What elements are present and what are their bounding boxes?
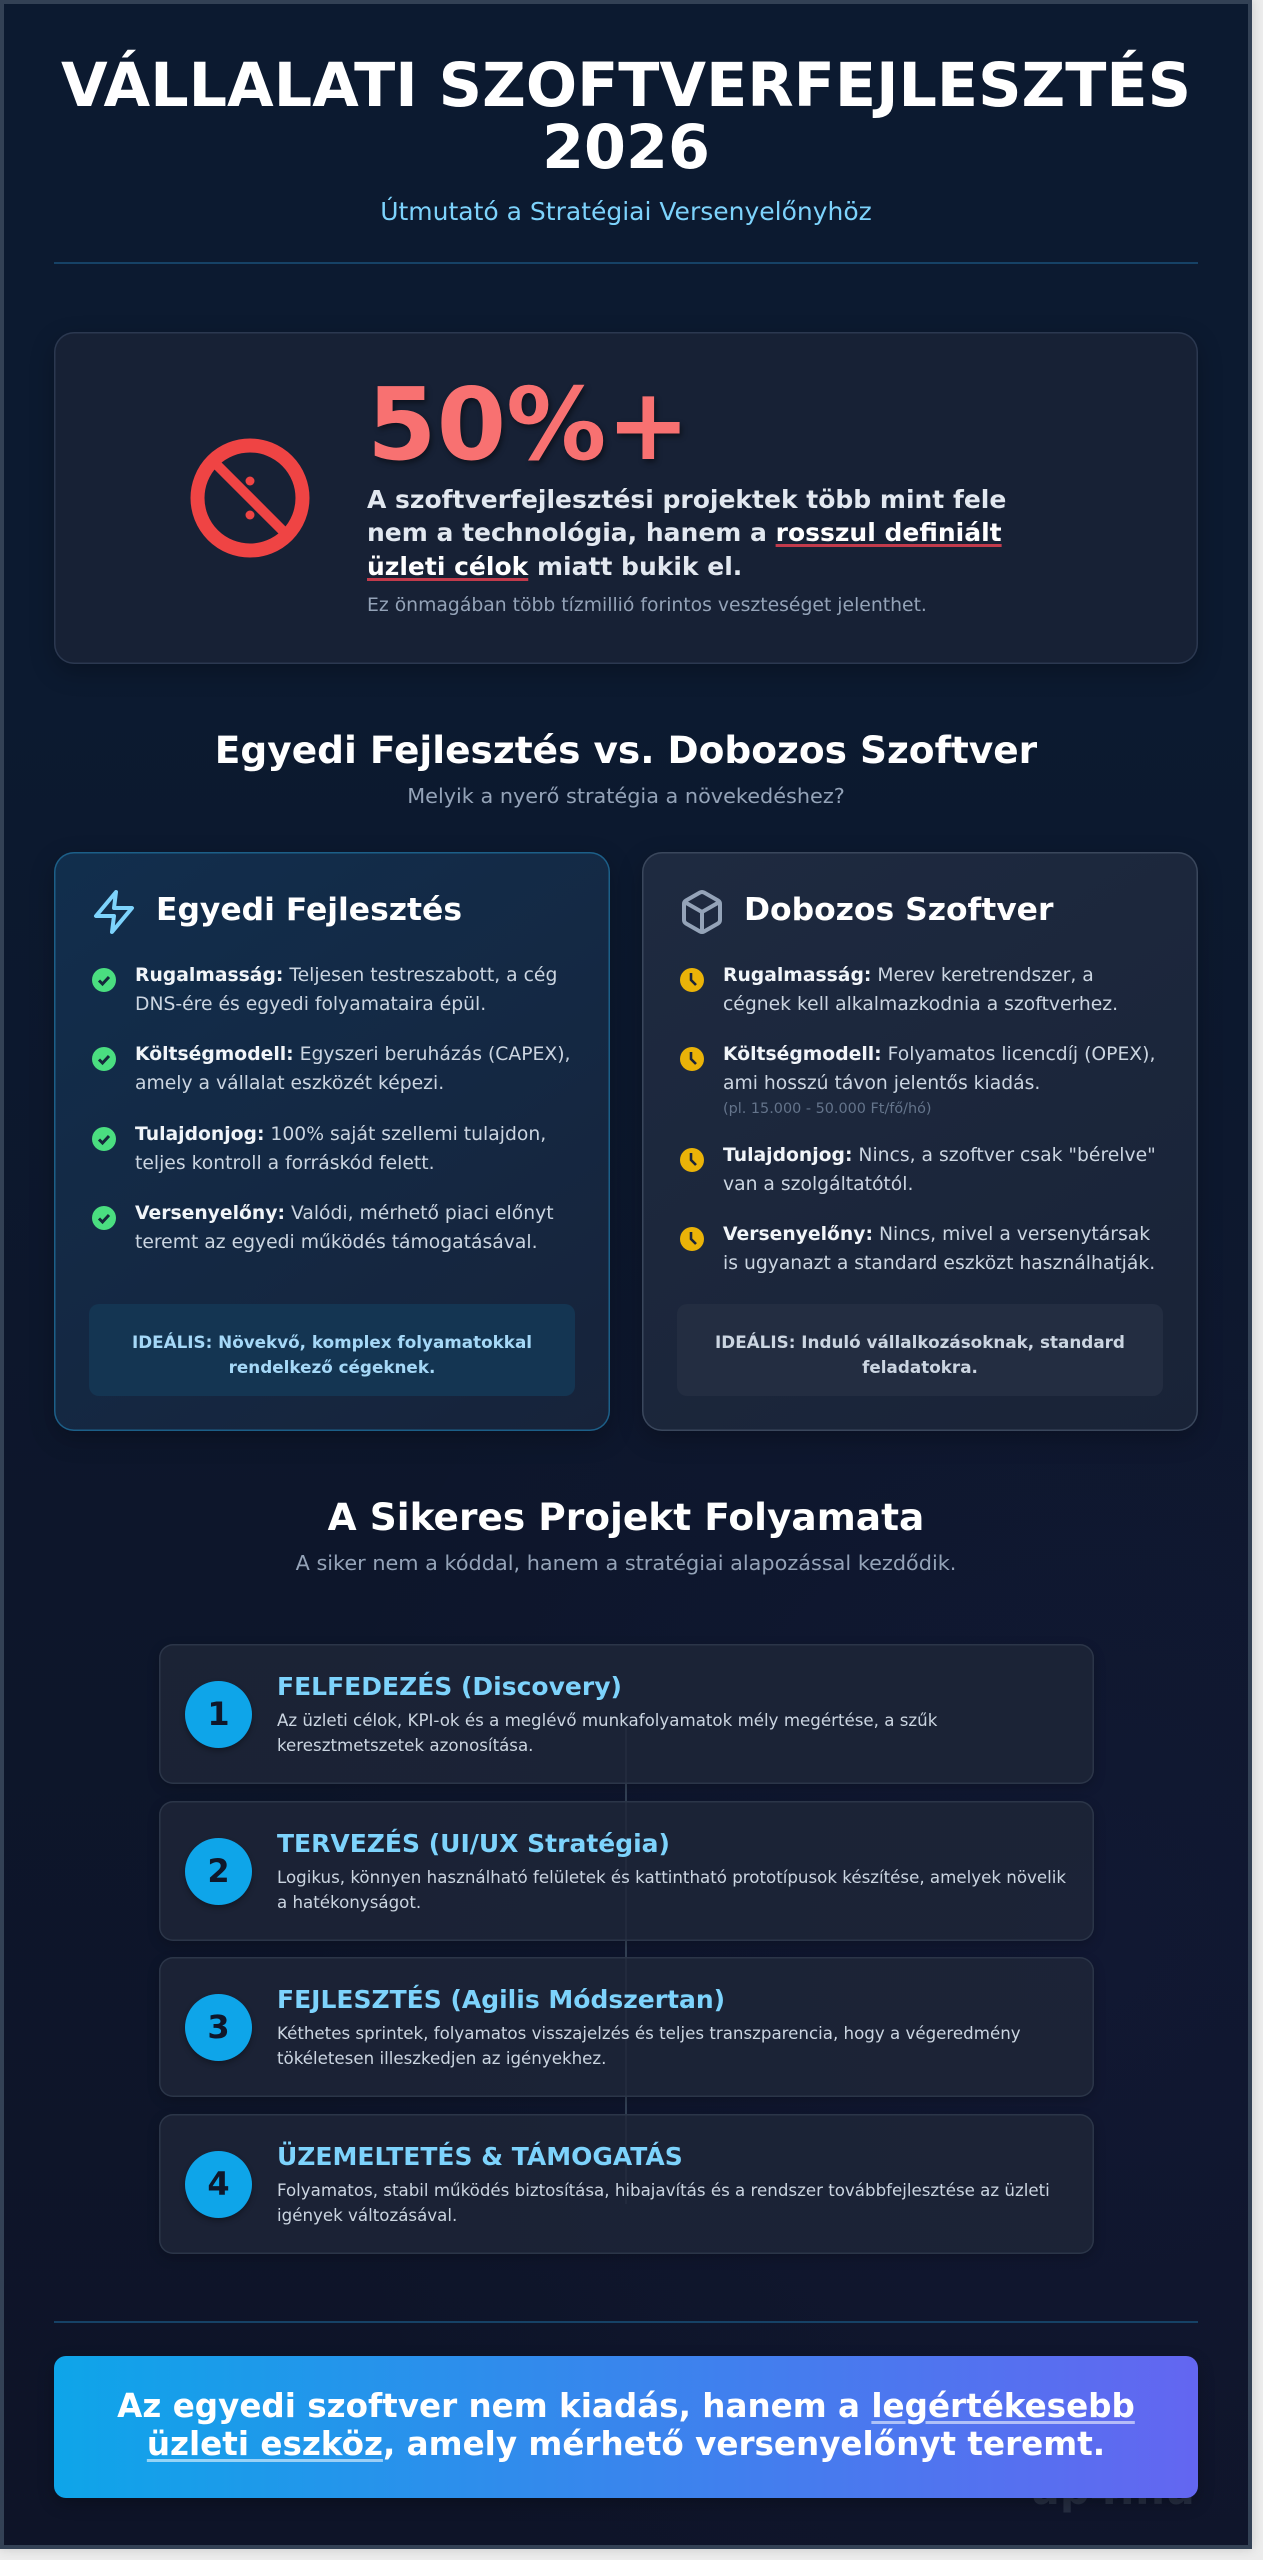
heading: comparison: Egyedi Fejlesztés vs. Dobozos Szoftver [215, 728, 1037, 772]
feature: ownership: teljes kontroll a forráskód felett. [135, 1153, 435, 1174]
feature: cost model: ami hosszú távon jelentős kiadás. [723, 1073, 1040, 1094]
step description: Folyamatos, stabil működés biztosítása, hibajavítás és a rendszer továbbfejlesztése az üzleti [277, 2181, 1050, 2200]
step description: tökéletesen illeszkedjen az igényekhez. [277, 2049, 606, 2068]
subtitle: Útmutató a Stratégiai Versenyelőnyhöz [380, 197, 872, 226]
step number [185, 1681, 252, 1748]
feature: flexibility [92, 965, 557, 1015]
title: VÁLLALATI SZOFTVERFEJLESZTÉS [61, 51, 1191, 121]
step title: ÜZEMELTETÉS & TÁMOGATÁS [277, 2142, 683, 2171]
call to action banner: üzleti eszköz, amely mérhető versenyelőnyt teremt. [147, 2425, 1105, 2463]
statistic description [367, 484, 1006, 581]
step number: 1 [207, 1695, 230, 1733]
feature: cost model: Költségmodell: Folyamatos licencdíj (OPEX), [723, 1044, 1155, 1065]
step 3 [159, 1957, 1094, 2097]
feature: flexibility: Rugalmasság: Merev keretrendszer, a [723, 965, 1094, 986]
process steps [159, 1644, 1094, 2254]
callout: ideal for [677, 1304, 1163, 1396]
card heading: Dobozos Szoftver [744, 892, 1053, 928]
feature: competitive advantage: Versenyelőny: Valódi, mérhető piaci előnyt [135, 1203, 554, 1224]
feature: ownership [92, 1124, 546, 1174]
step title: FEJLESZTÉS (Agilis Módszertan) [277, 1985, 725, 2014]
step description [277, 2181, 1050, 2225]
feature: flexibility: Rugalmasság: Teljesen testreszabott, a cég [135, 965, 557, 986]
step description: igények változásával. [277, 2206, 457, 2225]
connector line [625, 1714, 627, 2204]
statistic note: Ez önmagában több tízmillió forintos veszteséget jelenthet. [367, 595, 927, 616]
feature: competitive advantage [92, 1203, 554, 1253]
step 4 [159, 2114, 1094, 2254]
feature: competitive advantage: Versenyelőny: Nincs, mivel a versenytársak [723, 1224, 1150, 1245]
step description: keresztmetszetek azonosítása. [277, 1736, 533, 1755]
feature: flexibility: DNS-ére és egyedi folyamataira épül. [135, 994, 486, 1015]
step description [277, 1868, 1066, 1912]
step description: a hatékonyságot. [277, 1893, 421, 1912]
big number: 50%+ [367, 366, 690, 483]
step number [185, 1838, 252, 1905]
call to action banner [54, 2356, 1198, 2498]
step title: FELFEDEZÉS (Discovery) [277, 1672, 622, 1701]
step 1 [159, 1644, 1094, 1784]
title [61, 50, 1191, 183]
step description [277, 2024, 1021, 2068]
feature: flexibility: cégnek kell alkalmazkodnia a szoftverhez. [723, 994, 1118, 1015]
feature: ownership: Tulajdonjog: 100% saját szellemi tulajdon, [135, 1124, 546, 1145]
statistic description: A szoftverfejlesztési projektek több mint fele [367, 484, 1006, 514]
step number: 4 [207, 2165, 230, 2203]
panel: packaged software [642, 852, 1198, 1431]
callout: ideal for [89, 1304, 575, 1396]
feature: cost model [680, 1044, 1155, 1117]
title: 2026 [542, 113, 710, 183]
feature: flexibility [680, 965, 1118, 1015]
step description: Logikus, könnyen használható felületek és kattintható prototípusok készítése, amelyek növelik [277, 1868, 1066, 1887]
step number: 2 [207, 1852, 230, 1890]
callout: ideal for: rendelkező cégeknek. [229, 1357, 435, 1377]
step title: TERVEZÉS (UI/UX Stratégia) [277, 1829, 670, 1858]
feature: cost model: Költségmodell: Egyszeri beruházás (CAPEX), [135, 1044, 570, 1065]
feature: competitive advantage: is ugyanazt a standard eszközt használhatják. [723, 1253, 1155, 1274]
step description: Az üzleti célok, KPI-ok és a meglévő munkafolyamatok mély megértése, a szűk [277, 1711, 937, 1730]
call to action banner: Az egyedi szoftver nem kiadás, hanem a legértékesebb [117, 2387, 1135, 2425]
feature: competitive advantage: teremt az egyedi működés támogatásával. [135, 1232, 538, 1253]
callout: ideal for: IDEÁLIS: Induló vállalkozásoknak, standard [715, 1332, 1125, 1352]
panel: key statistic [54, 332, 1198, 664]
process subtitle: A siker nem a kóddal, hanem a stratégiai alapozással kezdődik. [296, 1551, 956, 1575]
statistic description: nem a technológia, hanem a rosszul definiált [367, 518, 1002, 547]
watermark: up4.hu [1030, 2465, 1195, 2514]
feature: ownership: Tulajdonjog: Nincs, a szoftver csak "bérelve" [723, 1145, 1156, 1166]
feature: competitive advantage [680, 1224, 1155, 1274]
step number: 3 [207, 2008, 230, 2046]
feature: ownership: van a szolgáltatótól. [723, 1174, 913, 1195]
feature: cost model: amely a vállalat eszközét képezi. [135, 1073, 444, 1094]
feature: cost model [92, 1044, 570, 1094]
callout: ideal for: feladatokra. [862, 1357, 978, 1377]
icon: prohibited sign [190, 438, 310, 558]
comparison subtitle: Melyik a nyerő stratégia a növekedéshez? [407, 784, 845, 808]
step description [277, 1711, 938, 1755]
step 2 [159, 1801, 1094, 1941]
feature: ownership [680, 1145, 1156, 1195]
panel: custom development [54, 852, 610, 1431]
price note: (pl. 15.000 - 50.000 Ft/fő/hó) [723, 1101, 932, 1117]
heading: process: A Sikeres Projekt Folyamata [328, 1495, 924, 1539]
statistic description: üzleti célok miatt bukik el. [367, 552, 742, 581]
step number [185, 2151, 252, 2218]
callout: ideal for: IDEÁLIS: Növekvő, komplex folyamatokkal [132, 1332, 532, 1352]
icon: box [682, 890, 722, 934]
step number [185, 1994, 252, 2061]
icon: bolt [94, 890, 134, 934]
card heading: Egyedi Fejlesztés [156, 892, 462, 928]
step description: Kéthetes sprintek, folyamatos visszajelzés és teljes transzparencia, hogy a végeredmény [277, 2024, 1021, 2043]
